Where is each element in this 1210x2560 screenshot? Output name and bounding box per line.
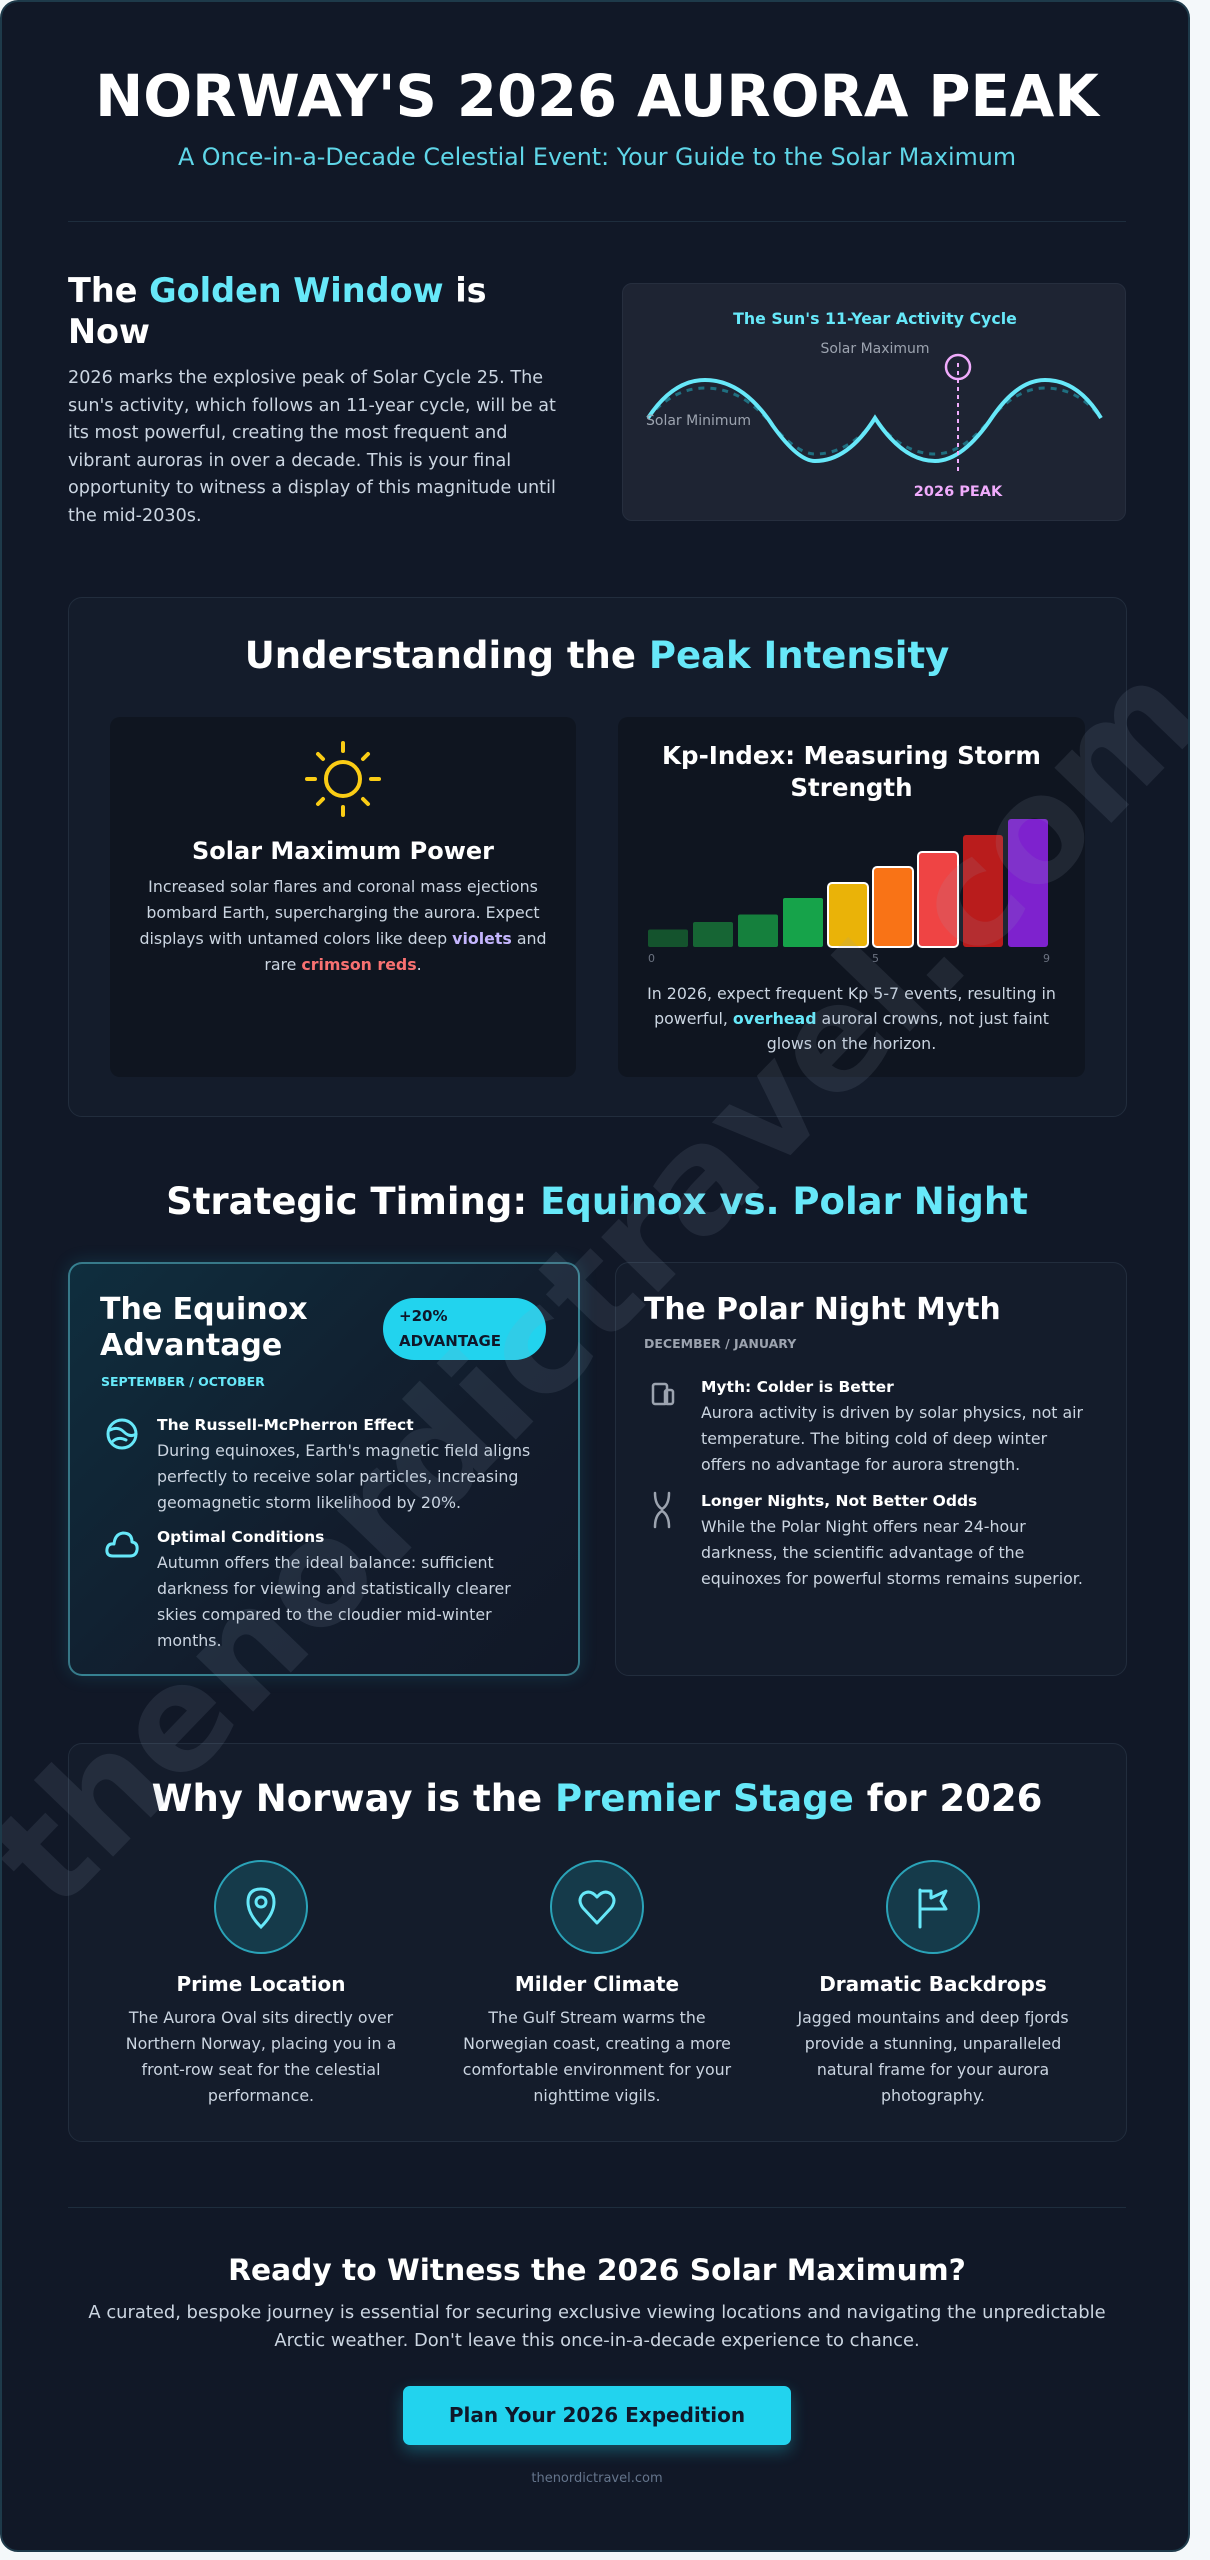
panel: equinox advantage: darkness for viewing and statistically clearer [157,1579,511,1598]
feature: milder climate: Norwegian coast, creating a more [463,2034,731,2053]
text: call to action: A curated, bespoke journey is essential for securing exclusive viewing locations and navigating the unpredictable [88,2302,1106,2323]
heading: golden window: Now [68,312,150,351]
chart: solar cycle: Solar Minimum [646,413,751,429]
feature: dramatic backdrops: Dramatic Backdrops [819,1972,1047,1996]
heading: strategic timing: Strategic Timing: Equinox vs. Polar Night [166,1180,1028,1223]
feature: prime location: The Aurora Oval sits directly over [129,2008,393,2027]
feature: milder climate: The Gulf Stream warms the [488,2008,706,2027]
panel: polar night myth: Aurora activity is driven by solar physics, not air [701,1403,1083,1422]
panel: equinox advantage: months. [157,1631,222,1650]
panel: polar night myth: equinoxes for powerful storms remains superior. [701,1569,1083,1588]
bar chart: kp scale: 0 [648,952,655,965]
card: kp-index: Strength [790,773,913,802]
text: golden window paragraph: its most powerful, creating the most frequent and [68,423,508,443]
icon: sun [305,741,381,817]
heading: golden window [68,271,487,351]
icon: cloud [105,1532,139,1558]
card: solar maximum power: bombard Earth, supercharging the aurora. Expect [146,903,540,922]
heading: premier stage: Why Norway is the Premier Stage for 2026 [152,1777,1042,1820]
panel: equinox advantage: The Russell-McPherron Effect [157,1416,414,1434]
chart: solar cycle: The Sun's 11-Year Activity Cycle [733,309,1017,328]
panel: equinox advantage: Advantage [100,1328,282,1363]
feature: prime location [126,1860,396,2105]
feature: milder climate: nighttime vigils. [533,2086,661,2105]
panel: polar night myth: temperature. The biting cold of deep winter [701,1429,1047,1448]
feature: dramatic backdrops [796,1860,1069,2105]
card: kp-index: powerful, overhead auroral crowns, not just faint [654,1009,1049,1028]
feature: prime location: Northern Norway, placing you in a [126,2034,396,2053]
card: solar maximum power: Increased solar flares and coronal mass ejections [148,877,538,896]
heading: peak intensity: Understanding the Peak Intensity [245,634,949,677]
panel: polar night myth: While the Polar Night offers near 24-hour [701,1517,1026,1536]
subtitle: A Once-in-a-Decade Celestial Event: Your Guide to the Solar Maximum [178,143,1016,171]
card: solar maximum power: rare crimson reds. [264,955,422,974]
panel: equinox advantage: During equinoxes, Earth's magnetic field aligns [157,1441,530,1460]
heading: call to action: Ready to Witness the 2026 Solar Maximum? [228,2253,966,2288]
panel: polar night myth: offers no advantage for aurora strength. [701,1455,1020,1474]
badge: +20% advantage [383,1298,546,1360]
feature: dramatic backdrops: provide a stunning, unparalleled [805,2034,1061,2053]
panel: equinox advantage: Autumn offers the ideal balance: sufficient [157,1553,494,1572]
text: golden window paragraph: 2026 marks the explosive peak of Solar Cycle 25. The [68,368,543,388]
text: call to action: Arctic weather. Don't leave this once-in-a-decade experience to chance. [274,2330,920,2351]
card: kp-index [618,717,1085,1077]
feature: dramatic backdrops: natural frame for your aurora [817,2060,1049,2079]
chart: solar cycle [622,283,1126,521]
heading: golden window: The Golden Window is [68,271,487,310]
card: solar maximum power: Solar Maximum Power [192,837,494,865]
badge: +20% advantage: ADVANTAGE [399,1332,501,1350]
card: solar maximum power [110,717,576,1077]
text: golden window paragraph [68,368,556,526]
chart: solar cycle: Solar Maximum [820,341,930,357]
panel: polar night myth: Myth: Colder is Better [701,1378,894,1396]
feature: milder climate: Milder Climate [515,1972,679,1996]
panel: equinox advantage: SEPTEMBER / OCTOBER [101,1374,265,1389]
feature: prime location: performance. [208,2086,314,2105]
panel: why norway [68,1743,1127,2142]
card: kp-index: glows on the horizon. [767,1034,936,1053]
feature: milder climate [463,1860,732,2105]
icon: hourglass [654,1492,670,1528]
panel: equinox advantage: The Equinox [100,1292,308,1327]
card: solar maximum power: displays with untamed colors like deep violets and [139,929,547,948]
feature: dramatic backdrops: photography. [881,2086,985,2105]
panel: equinox advantage: skies compared to the cloudier mid-winter [157,1605,492,1624]
chart: solar cycle: 2026 PEAK [914,484,1003,500]
panel: polar night myth: DECEMBER / JANUARY [644,1336,796,1351]
panel: polar night myth: darkness, the scientific advantage of the [701,1543,1024,1562]
bar chart: kp scale [648,819,1050,965]
feature: prime location: front-row seat for the celestial [142,2060,380,2079]
footer: thenordictravel.com [531,2471,663,2486]
bar chart: kp scale: 9 [1043,952,1050,965]
panel: polar night myth: The Polar Night Myth [644,1292,1001,1327]
card: kp-index: In 2026, expect frequent Kp 5-7 events, resulting in [647,984,1056,1003]
card: kp-index: Kp-Index: Measuring Storm [662,741,1041,770]
bar chart: kp scale: 5 [872,952,879,965]
icon: thermometer [652,1382,674,1406]
text: golden window paragraph: opportunity to witness a display of this magnitude until [68,478,556,498]
button: plan expedition: Plan Your 2026 Expedition [449,2403,745,2427]
panel: polar night myth: Longer Nights, Not Better Odds [701,1492,977,1510]
button: plan expedition [403,2386,791,2445]
badge: +20% advantage: +20% [399,1307,447,1325]
text: golden window paragraph: sun's activity, which follows an 11-year cycle, will be at [68,396,556,416]
panel: equinox advantage: Optimal Conditions [157,1528,324,1546]
text: call to action [88,2302,1106,2351]
feature: dramatic backdrops: Jagged mountains and deep fjords [797,2008,1069,2027]
feature: milder climate: comfortable environment for your [463,2060,731,2079]
panel: polar night myth [615,1262,1127,1676]
feature: prime location: Prime Location [176,1972,345,1996]
text: golden window paragraph: vibrant auroras in over a decade. This is your final [68,450,511,470]
text: golden window paragraph: the mid-2030s. [68,506,202,526]
panel: equinox advantage: geomagnetic storm likelihood by 20%. [157,1493,461,1512]
panel: peak intensity [68,597,1127,1117]
panel: equinox advantage: perfectly to receive solar particles, increasing [157,1467,518,1486]
title: NORWAY'S 2026 AURORA PEAK [95,63,1099,130]
icon: magnetic cycle [106,1418,138,1450]
panel: equinox advantage [68,1262,580,1676]
